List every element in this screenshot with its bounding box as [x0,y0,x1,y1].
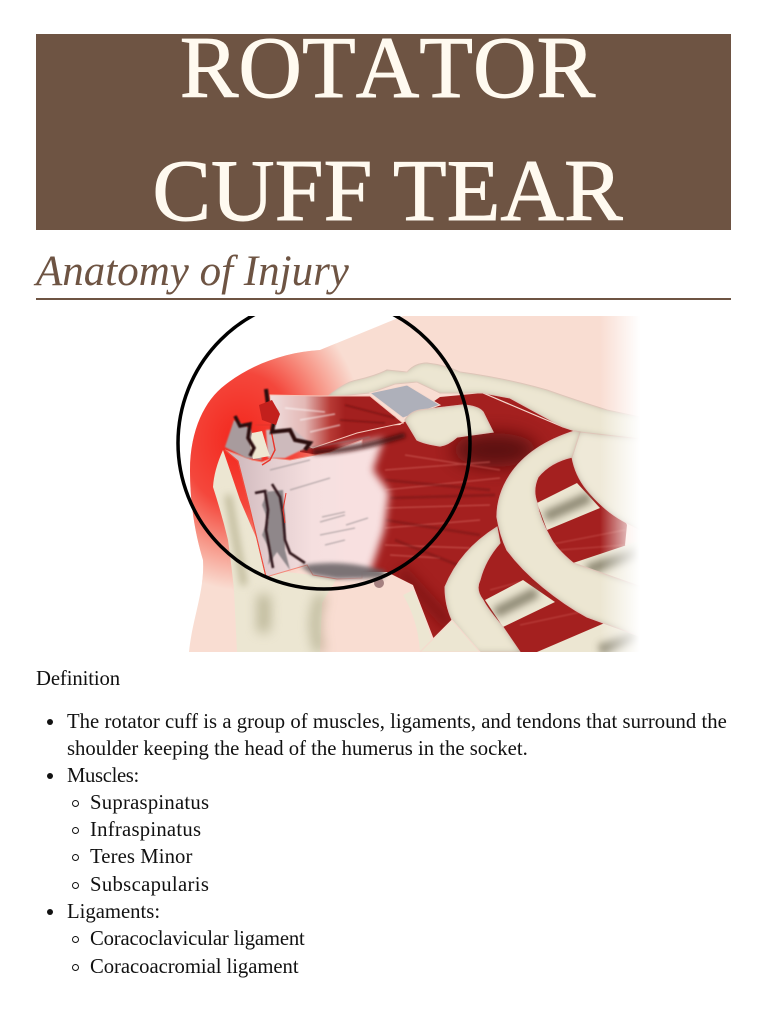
lateral scapula strip [403,590,433,652]
supraspinatus muscle [270,395,403,448]
nub under tendon [374,578,384,588]
item: ligaments: Ligaments: [67,901,160,923]
shoulder anatomy illustration [176,316,637,652]
section heading: Anatomy of Injury [36,248,349,295]
second rib [445,527,520,652]
item: muscles [47,765,209,896]
item: muscles: Infraspinatus [90,819,201,841]
large rib [497,431,650,640]
title banner [36,34,731,230]
scapula muscle [300,390,640,652]
definition label: Definition [36,668,120,690]
humerus bone [213,450,337,652]
item: ligaments: Coracoclavicular ligament [90,928,305,950]
torn cuff tendon [225,435,405,588]
rib bands [485,483,640,652]
inflammation glow [190,344,356,586]
upper tear fragments [225,389,312,577]
ribs [420,431,650,652]
item: rotator cuff description: shoulder keeping the head of the humerus in the socket. [67,738,528,760]
item: ligaments [47,901,305,978]
item: ligaments: Coracoacromial ligament [90,956,299,978]
highlight circle [178,297,470,589]
skin silhouette [189,316,633,652]
lower tear [255,484,305,570]
grey ligament [370,385,440,418]
item: muscles: Muscles: [67,765,139,787]
item: rotator cuff description [47,711,727,760]
definition list [47,711,727,978]
item: muscles: Subscapularis [90,874,209,896]
right edge fade [600,316,640,652]
item: muscles: Teres Minor [90,846,192,868]
coracoid bone [405,405,493,446]
item: rotator cuff description: The rotator cuff is a group of muscles, ligaments, and tendons that surround the [67,711,727,733]
tendon to muscle transition [340,438,389,578]
item: muscles: Supraspinatus [90,792,209,814]
right bone [572,432,628,524]
acromion and clavicle bone [328,362,628,436]
